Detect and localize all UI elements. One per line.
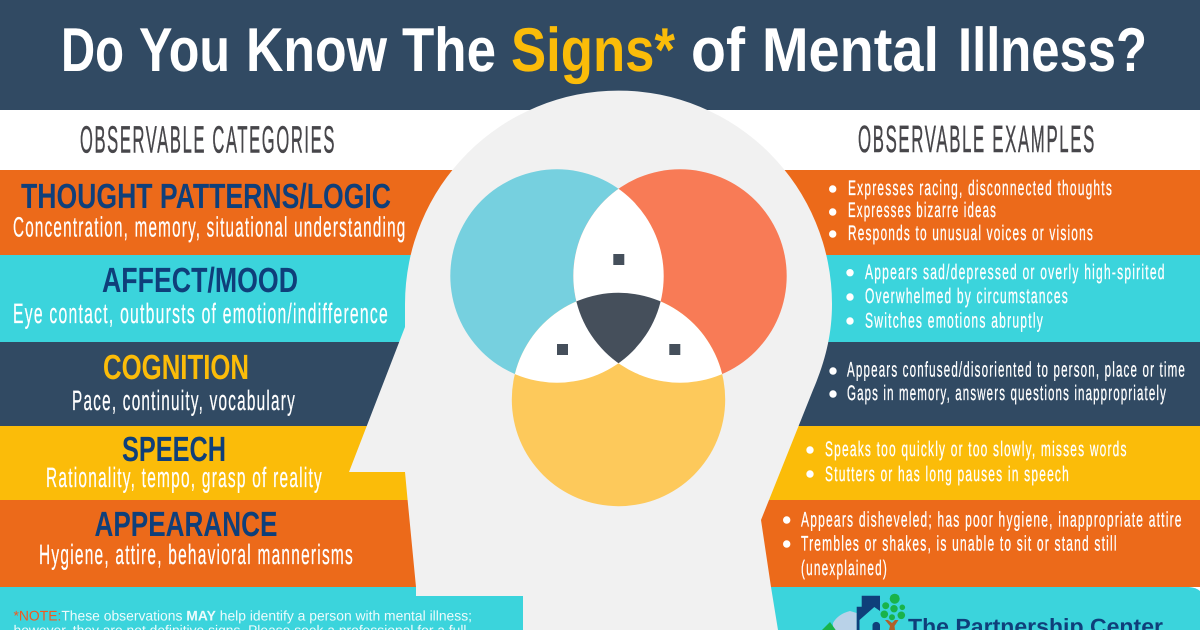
panel: appearance examples: [620, 500, 1200, 587]
icon: side building: [833, 611, 857, 630]
title: Signs*: [511, 16, 676, 85]
title: [61, 16, 1147, 85]
panel: speech category: [0, 426, 620, 500]
panel: appearance category: [0, 500, 620, 587]
panel: thought patterns category: Concentration, memory, situational understanding: [13, 212, 406, 242]
icon: green roof: [822, 622, 836, 630]
panel: footer logo background: [620, 587, 1200, 630]
panel: affect and mood examples: [620, 255, 1200, 342]
title: You: [139, 16, 230, 85]
panel: note: *NOTE:These observations MAY help identify a person with mental illness;: [14, 608, 472, 624]
title: Do: [61, 16, 124, 85]
text: OBSERVABLE CATEGORIES: [80, 120, 336, 162]
yellow circle: [512, 293, 725, 506]
panel: speech category: SPEECH: [122, 430, 226, 469]
panel: thought patterns examples: [620, 170, 1200, 255]
title: of: [691, 16, 745, 85]
title: The: [402, 16, 496, 85]
panel: cognition category: COGNITION: [103, 348, 249, 387]
centre overlap: [576, 292, 661, 364]
icon: house: [857, 596, 880, 630]
panel: affect and mood category: [0, 255, 620, 342]
venn diagram: [450, 169, 787, 506]
header band: [0, 0, 1200, 110]
panel: note: [0, 587, 523, 630]
right marker: [669, 344, 680, 355]
panel: cognition category: [0, 342, 620, 426]
panel: thought patterns category: THOUGHT PATTERNS/LOGIC: [21, 177, 391, 216]
panel: thought patterns examples: Expresses bizarre ideas: [848, 199, 997, 222]
left marker: [557, 344, 568, 355]
panel: cognition examples: [620, 342, 1200, 426]
title: Illness?: [958, 16, 1147, 85]
panel: appearance examples: (unexplained): [801, 557, 888, 580]
blue circle: [450, 169, 664, 383]
logo: The Partnership Center: [822, 594, 1163, 630]
panel: speech examples: [620, 426, 1200, 500]
panel: affect and mood category: AFFECT/MOOD: [102, 261, 298, 300]
title: Know: [246, 16, 388, 85]
overlap: red and yellow: [618, 302, 722, 383]
panel: cognition category: Pace, continuity, vocabulary: [72, 385, 296, 416]
overlap: blue and red: [573, 189, 664, 302]
head silhouette: [349, 91, 832, 630]
overlap: blue and yellow: [514, 302, 618, 383]
top marker: [613, 254, 624, 265]
panel: affect and mood examples: Switches emotions abruptly: [865, 310, 1044, 332]
panel: appearance category: Hygiene, attire, behavioral mannerisms: [39, 539, 354, 570]
panel: appearance category: APPEARANCE: [94, 505, 278, 544]
title: Mental: [762, 16, 939, 85]
red circle: [573, 169, 787, 383]
panel: speech category: Rationality, tempo, grasp of reality: [46, 462, 323, 493]
panel: thought patterns category: [0, 170, 620, 255]
icon: house door: [872, 622, 880, 630]
icon: tree: [880, 594, 905, 630]
panel: affect and mood category: Eye contact, outbursts of emotion/indifference: [13, 298, 389, 329]
